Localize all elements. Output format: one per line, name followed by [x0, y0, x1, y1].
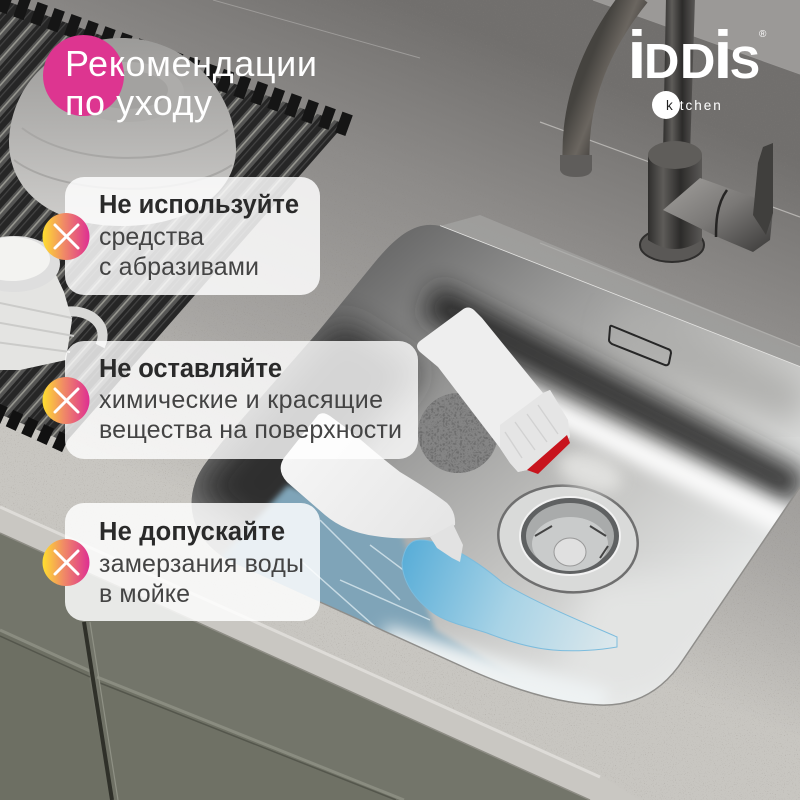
sink basin: [190, 215, 800, 720]
white cleanser bottle with red cap: [417, 308, 570, 474]
spout: [576, 0, 637, 156]
faucet: [560, 0, 773, 262]
logo: k: [666, 98, 675, 113]
faucet base: [640, 228, 704, 262]
cabinet fronts: [0, 530, 600, 800]
card 3 heading: Не допускайте: [99, 518, 285, 546]
card 1 body: с абразивами: [99, 253, 259, 281]
card 2: [42, 341, 418, 459]
card 1 body: [99, 223, 259, 281]
rack end caps, top: [0, 0, 350, 126]
lever: [663, 178, 773, 252]
card 2 body: вещества на поверхности: [99, 416, 402, 444]
blue gel: [402, 540, 617, 651]
white bowl: [9, 38, 236, 226]
white cup: [0, 236, 103, 370]
logo: ®: [759, 29, 767, 40]
title: Рекомендации: [65, 43, 317, 84]
riser tube: [663, 0, 695, 155]
card 1 body: средства: [99, 223, 204, 251]
title: [43, 35, 317, 123]
card 2 body: химические и красящие: [99, 386, 383, 414]
card 3 body: [99, 550, 304, 608]
overflow slot: [609, 326, 671, 365]
logo: D: [644, 35, 679, 89]
countertop front lip: [0, 505, 640, 800]
logo: D: [680, 35, 715, 89]
icon: cross: [42, 539, 90, 586]
drying rack: [0, 0, 353, 452]
card 3: [42, 503, 320, 621]
frost on sink wall: [237, 482, 488, 664]
powder spill: [552, 443, 628, 501]
card 2 body: [99, 386, 402, 444]
logo: S: [730, 37, 760, 88]
logo: i: [714, 17, 732, 93]
steel scourer: [418, 393, 498, 473]
logo: [628, 17, 767, 119]
title: по уходу: [65, 82, 212, 123]
drain: [491, 477, 645, 601]
logo: i: [628, 17, 646, 93]
white gel bottle with nozzle: [281, 413, 463, 562]
rack end caps, bottom: [0, 411, 66, 444]
icon: cross: [42, 377, 90, 424]
logo: itchen: [675, 98, 723, 113]
card 2 heading: Не оставляйте: [99, 355, 282, 383]
card 1: [42, 177, 320, 295]
card 1 heading: Не используйте: [99, 191, 299, 219]
faucet body: [648, 155, 702, 249]
card 3 body: в мойке: [99, 580, 190, 608]
icon: cross: [42, 213, 90, 260]
card 3 body: замерзания воды: [99, 550, 304, 578]
